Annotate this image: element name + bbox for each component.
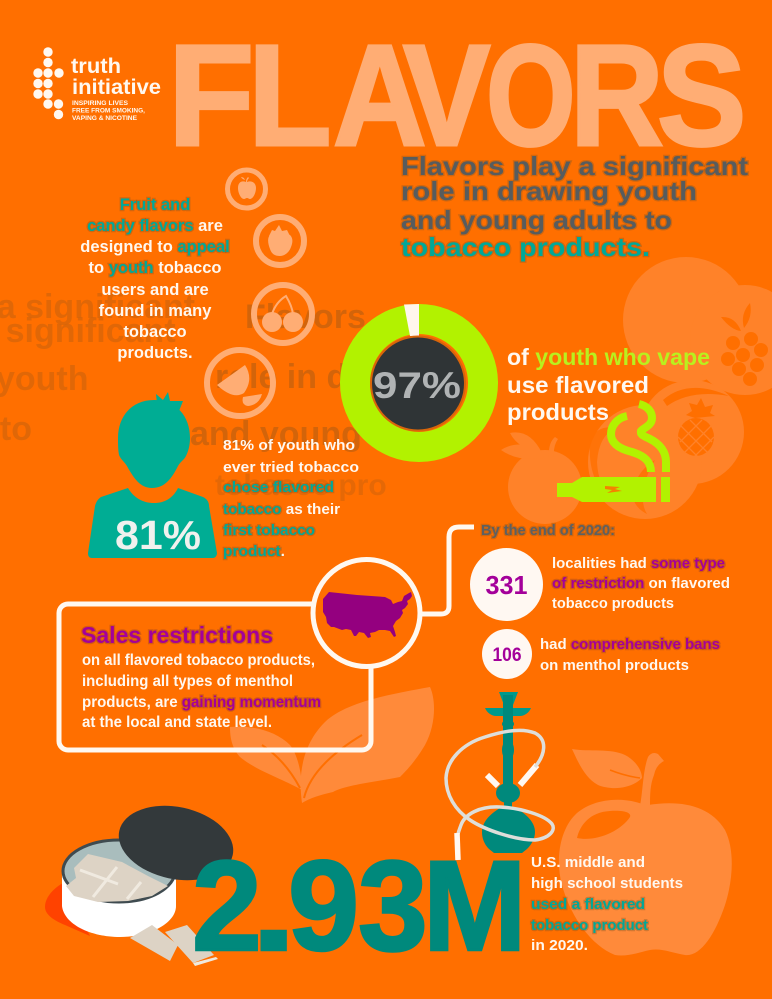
title: L (248, 15, 332, 176)
icon: cherries circle (254, 285, 312, 343)
fruit and candy text block: to youth tobacco (89, 259, 221, 277)
loose pouches (130, 925, 178, 961)
stat: 331 localities: 331 (486, 570, 528, 600)
fruit and candy text block: products. (117, 344, 193, 362)
panel text: including all types of menthol (82, 673, 293, 690)
2.93M text block: high school students (531, 875, 683, 892)
81% text block (223, 438, 359, 560)
tin inside (63, 840, 175, 902)
panel text (82, 652, 321, 731)
title: A (333, 16, 427, 177)
stat: 106 menthol bans: had comprehensive bans (540, 637, 720, 653)
boy icon with 81% (88, 392, 217, 558)
ghost text artifacts: and young (190, 415, 362, 453)
81% text block: 81% of youth who (223, 438, 355, 454)
stem and beads (482, 695, 535, 853)
panel text: products, are gaining momentum (82, 694, 321, 711)
title: O (486, 15, 576, 176)
connector line (420, 527, 474, 614)
icon: vape device and smoke (557, 404, 670, 502)
panel: sales restrictions (59, 527, 474, 750)
hose (446, 730, 553, 840)
hair (156, 392, 183, 411)
vape stat text (507, 344, 710, 425)
icon: orange slice circle (207, 350, 273, 416)
hose tip (457, 833, 458, 860)
logo tagline (72, 100, 145, 122)
ghost text artifacts (0, 288, 387, 502)
fruit and candy text block: users and are (101, 281, 209, 299)
81% text block: first tobacco (223, 523, 315, 539)
logo tagline: INSPIRING LIVES (72, 100, 129, 107)
stat: 331 localities: of restriction on flavored (552, 576, 730, 592)
stat: 331 localities (470, 548, 730, 621)
big stat: 2.93M: 9 (288, 835, 359, 978)
map circle (313, 560, 420, 666)
81% text block: ever tried tobacco (223, 460, 359, 476)
donut value: 97% (373, 365, 461, 406)
2.93M text block (531, 854, 683, 954)
bowl and tray (485, 692, 531, 716)
logo dot mark (33, 47, 64, 119)
2.93M text block: tobacco product (531, 917, 648, 934)
fruit and candy text block: tobacco (123, 323, 187, 341)
title: V (403, 15, 490, 176)
background apple (559, 749, 732, 955)
stat: 106 menthol bans: 106 (492, 645, 522, 666)
big stat: 2.93M: 3 (358, 834, 428, 977)
mouthpieces (487, 765, 537, 786)
panel text: on all flavored tobacco products, (82, 652, 315, 669)
icon: USA map (323, 592, 412, 638)
2.93M text block: used a flavored (531, 896, 645, 913)
title: R (570, 16, 664, 177)
2.93M text block: in 2020. (531, 937, 588, 954)
background leaves (230, 687, 434, 803)
icon: strawberry circle (256, 217, 304, 265)
81% text block: chose flavored (223, 480, 334, 496)
fruit and candy text block: found in many (99, 302, 212, 320)
icon: hookah (446, 692, 553, 860)
intro heading (401, 151, 748, 262)
big stat: 2.93M (192, 834, 526, 978)
big stat: 2.93M: . (251, 835, 297, 978)
shadow (45, 883, 90, 936)
fruit and candy text block: candy flavors are (87, 217, 223, 235)
head (118, 400, 190, 488)
big stat: 2.93M: M (423, 834, 526, 977)
icon: apple circle (228, 170, 266, 208)
logo tagline: FREE FROM SMOKING, (72, 108, 145, 114)
logo wordmark: truth (71, 55, 121, 78)
by the end of 2020 label: By the end of 2020: (481, 523, 615, 539)
vape stat text: products (507, 399, 609, 425)
fruit and candy text block: Fruit and (120, 196, 190, 214)
donut chart: 97% (355, 304, 483, 447)
intro heading: Flavors play a significant (401, 151, 748, 181)
icon: snus tin (45, 796, 240, 966)
title (168, 15, 746, 177)
background fruit: grapes pineapple peach orange (501, 257, 772, 524)
stat: 331 localities: localities had some type (552, 556, 725, 572)
intro heading: tobacco products. (401, 232, 650, 262)
title: F (168, 16, 254, 176)
fruit and candy text block (80, 196, 230, 362)
81% text block: product . (223, 544, 285, 560)
vape stat text: use flavored (507, 372, 649, 398)
lid (112, 796, 240, 890)
stat: 106 menthol bans: on menthol products (540, 658, 689, 674)
logo tagline: VAPING & NICOTINE (72, 115, 138, 122)
tin body (62, 872, 176, 937)
value: 81% (115, 512, 201, 558)
stat: 106 menthol bans (482, 629, 720, 679)
81% text block: tobacco as their (223, 502, 340, 518)
ghost text artifacts: role in dr (215, 358, 360, 396)
vape stat text: of youth who vape (507, 344, 710, 370)
logo: truth initiative (33, 47, 161, 122)
body (88, 488, 217, 558)
white 3 percent slice (404, 304, 419, 336)
stat: 331 localities: tobacco products (552, 596, 674, 612)
big stat: 2.93M: 2 (192, 834, 262, 977)
pouches in tin (66, 854, 168, 902)
title: S (657, 16, 746, 176)
logo wordmark second line: initiative (72, 76, 161, 99)
intro heading: role in drawing youth (401, 176, 697, 206)
2.93M text block: U.S. middle and (531, 854, 645, 871)
ghost text artifacts: tobacco pro (215, 469, 387, 502)
panel text: at the local and state level. (82, 714, 272, 731)
panel heading: Sales restrictions (81, 622, 273, 648)
ghost text artifacts: Flavors (245, 298, 366, 336)
fruit and candy text block: designed to appeal (80, 238, 230, 256)
intro heading: and young adults to (401, 205, 672, 235)
